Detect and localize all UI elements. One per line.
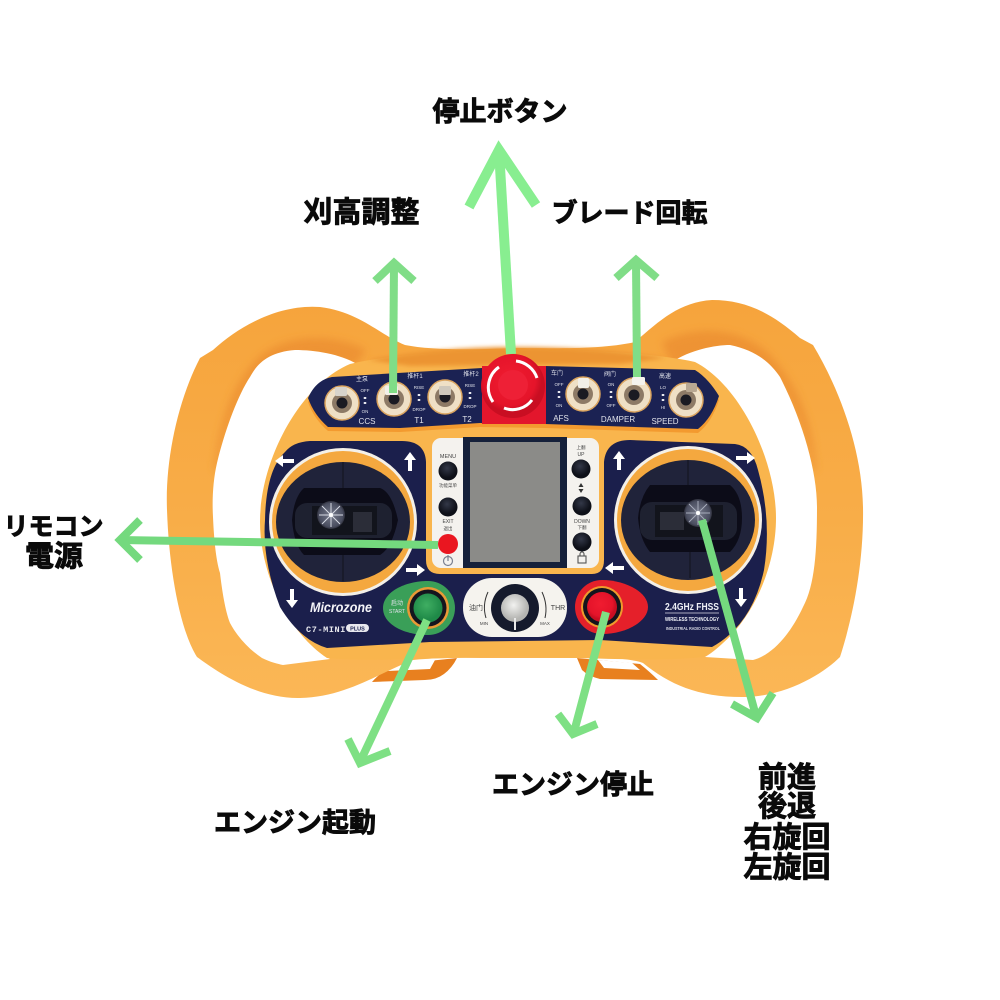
button: UP	[572, 444, 590, 493]
controller body	[260, 350, 776, 660]
right joystick	[614, 446, 762, 594]
left handle opening	[213, 350, 357, 665]
switch labels: DROP	[463, 404, 477, 409]
switch labels: 阀门	[604, 370, 616, 378]
switch labels: T2	[462, 415, 472, 424]
switch labels: 车门	[551, 369, 563, 377]
switch labels: SPEED	[651, 417, 679, 426]
label: joystick functions: 後退	[758, 790, 816, 823]
button: MENU: 功能菜单	[439, 482, 457, 489]
switch labels: OFF	[606, 403, 616, 408]
start button: START	[389, 609, 405, 615]
switch labels: T1	[414, 416, 424, 425]
panel: top switch panel	[308, 366, 719, 433]
arrow: remote power	[120, 520, 438, 560]
arrow: blade rotation	[616, 260, 657, 377]
switch labels: ON	[556, 403, 562, 408]
arrow: cutting height	[375, 263, 414, 393]
switch labels: 推杆1	[407, 372, 423, 380]
toggle switch: DAMPER	[617, 377, 651, 412]
switch labels: DROP	[412, 407, 426, 412]
darker inner rim of handles	[214, 331, 816, 470]
button: MENU: MENU	[440, 454, 456, 460]
button: UP: 上翻	[576, 444, 586, 451]
label: remote power: リモコン	[3, 513, 104, 541]
button: EXIT: EXIT	[442, 519, 454, 525]
label: joystick functions: 右旋回	[743, 821, 831, 854]
switch labels: 主泵	[356, 375, 368, 383]
left joystick	[269, 448, 417, 596]
label: cutting height: 刈高調整	[303, 196, 420, 229]
button: lock	[572, 532, 592, 563]
brand logo	[306, 600, 372, 635]
button: UP: UP	[578, 452, 585, 458]
switch labels: AFS	[553, 414, 569, 423]
lcd screen	[470, 442, 560, 562]
start button: 启动	[391, 599, 403, 607]
label: joystick functions	[743, 761, 831, 884]
throttle dial: MAX	[540, 621, 550, 626]
switch labels: ON	[362, 409, 368, 414]
switch labels: OFF	[360, 388, 370, 393]
throttle dial: THR	[551, 605, 565, 612]
label: remote power	[3, 513, 104, 573]
direction arrows	[275, 451, 755, 608]
emergency stop button	[481, 354, 546, 424]
button: EXIT: 退出	[444, 525, 453, 532]
button: EXIT	[438, 498, 458, 532]
arrow: stop button	[469, 150, 536, 354]
brand logo: Microzone	[310, 600, 372, 615]
remote controller	[167, 300, 863, 698]
start button	[383, 581, 455, 635]
wireless spec text	[665, 602, 720, 632]
wireless spec text: INDUSTRIAL RADIO CONTROL	[666, 626, 720, 632]
label: joystick functions: 左旋回	[743, 851, 831, 884]
label: engine stop: エンジン停止	[492, 770, 654, 800]
switch labels	[356, 369, 679, 426]
button: DOWN	[572, 496, 592, 531]
switch labels: CCS	[359, 417, 375, 426]
throttle dial	[463, 578, 567, 637]
toggle switch: SPEED	[669, 383, 703, 417]
switch labels: ON	[608, 382, 614, 387]
label: remote power: 電源	[25, 540, 83, 573]
switch labels: OFF	[554, 382, 564, 387]
right handle opening	[672, 345, 817, 660]
button: DOWN: 下翻	[578, 524, 587, 531]
joystick knob	[684, 499, 712, 527]
label: stop button: 停止ボタン	[432, 97, 568, 127]
label: blade rotation: ブレード回転	[551, 198, 708, 228]
switch labels: 高速	[659, 372, 671, 380]
label: joystick functions: 前進	[758, 761, 816, 794]
arrow: engine start	[348, 620, 427, 763]
button: MENU	[438, 454, 458, 489]
wireless spec text: WIRELESS TECHNOLOGY	[665, 617, 719, 623]
switch labels: RISE	[414, 385, 424, 390]
darker top band	[368, 347, 666, 366]
arrow: engine stop	[558, 612, 606, 734]
button: power	[438, 534, 458, 566]
throttle dial: 油门	[469, 603, 483, 612]
panel: screen and side buttons	[432, 437, 599, 568]
switch labels: RISE	[465, 383, 475, 388]
toggle switch: CCS	[325, 386, 359, 420]
switch labels: DAMPER	[601, 415, 635, 424]
bottom mounting tabs	[372, 658, 658, 682]
toggle switch: T1	[377, 382, 411, 416]
throttle dial: MIN	[480, 621, 488, 626]
toggle switch: T2	[428, 380, 462, 414]
brand logo: PLUS	[350, 626, 365, 632]
switch labels: 推杆2	[463, 370, 479, 378]
label: engine start: エンジン起動	[214, 808, 376, 838]
wireless spec text: 2.4GHz FHSS	[665, 602, 719, 613]
joystick knob	[317, 501, 345, 529]
panel: main navy control panel	[265, 440, 767, 648]
switch labels: HI	[661, 405, 665, 410]
switch labels: LO	[660, 385, 666, 390]
button: DOWN: DOWN	[574, 519, 590, 525]
brand logo: C7-MINI	[306, 625, 346, 635]
arrow: joystick movement	[702, 520, 773, 718]
stop button	[575, 580, 648, 634]
orange rubber handle frame	[167, 300, 863, 698]
toggle switch: AFS	[566, 377, 600, 411]
